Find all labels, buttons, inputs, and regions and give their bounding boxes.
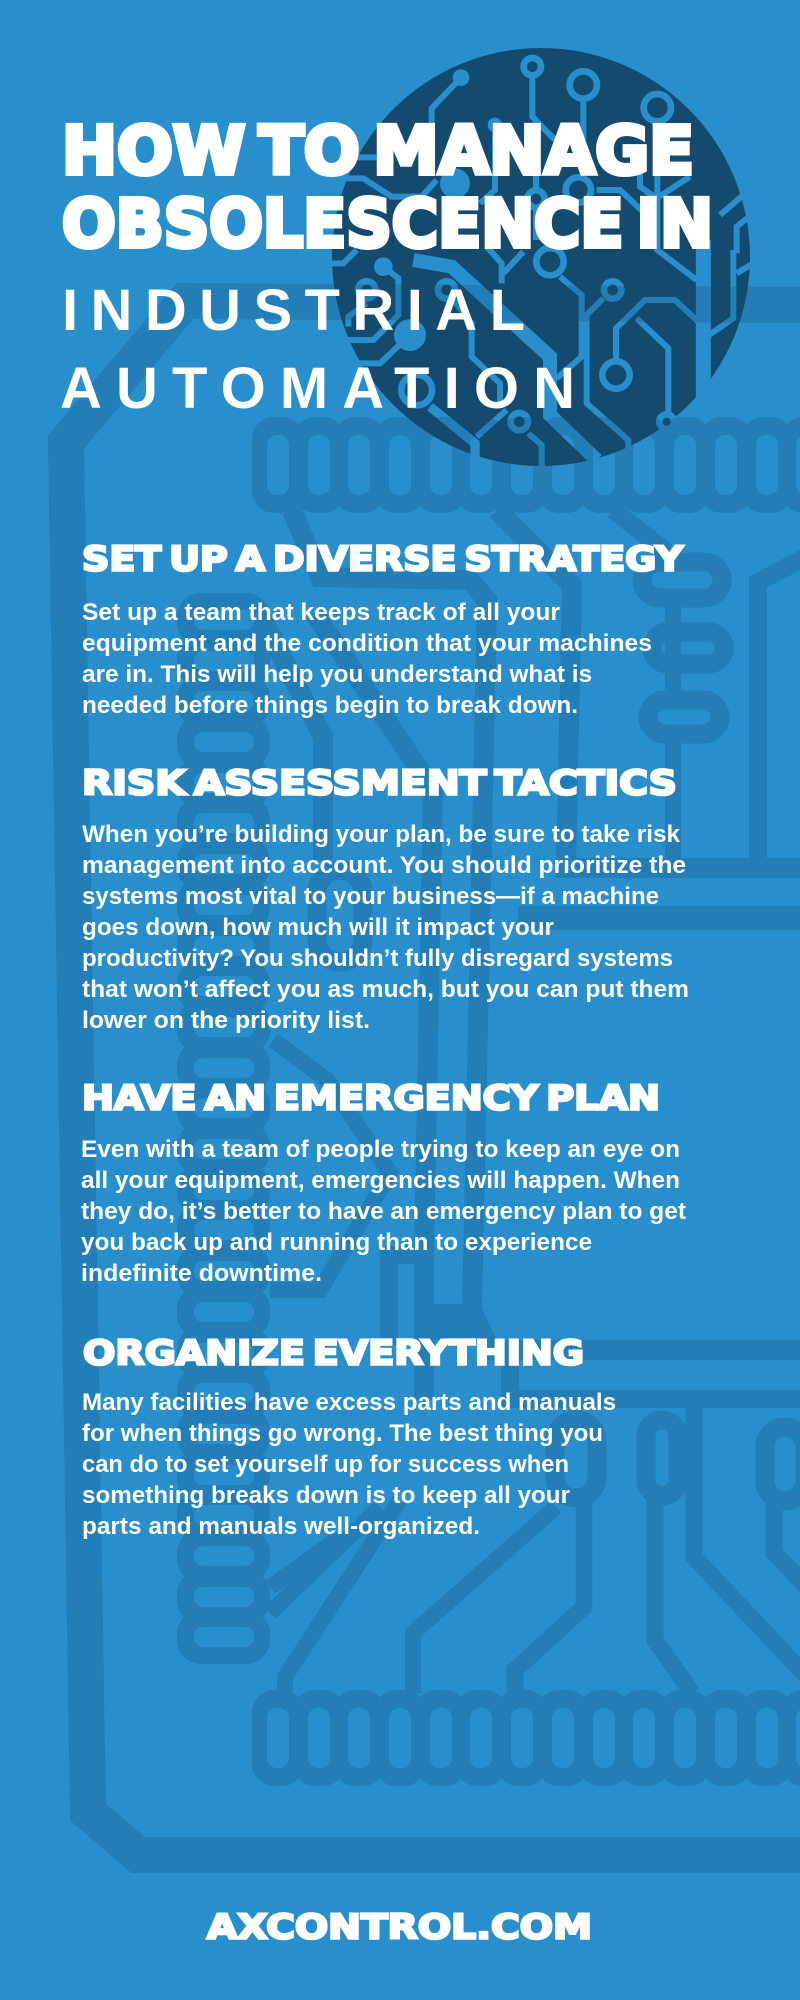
body text: they do, it’s better to have an emergency plan to get: [81, 1198, 686, 1225]
top coil: [252, 417, 800, 513]
body text: equipment and the condition that your machines: [82, 630, 652, 657]
vertical coil: [177, 593, 270, 1664]
body text: systems most vital to your business—if a machine: [82, 883, 659, 910]
heading: HAVE AN EMERGENCY PLAN: [82, 1079, 660, 1119]
body text: productivity? You shouldn’t fully disregard systems: [82, 945, 673, 972]
body text: can do to set yourself up for success when: [82, 1451, 569, 1478]
body text: Set up a team that keeps track of all your: [82, 599, 560, 626]
body text: for when things go wrong. The best thing you: [82, 1420, 603, 1447]
heading: SET UP A DIVERSE STRATEGY: [82, 540, 683, 580]
circuit board background pattern: [66, 301, 800, 1855]
body text: parts and manuals well-organized.: [82, 1513, 480, 1540]
body text: [81, 1136, 686, 1287]
body text: indefinite downtime.: [81, 1260, 322, 1287]
title line 2: OBSOLESCENCE IN: [62, 186, 713, 262]
heading: ORGANIZE EVERYTHING: [83, 1334, 584, 1374]
section: organize everything: [82, 1334, 616, 1540]
circuit disc illustration: [332, 48, 750, 466]
body text: Many facilities have excess parts and manuals: [82, 1389, 616, 1416]
body text: all your equipment, emergencies will happen. When: [81, 1167, 680, 1194]
bottom coil: [252, 1690, 800, 1786]
body text: When you’re building your plan, be sure to take risk: [82, 821, 681, 848]
title line 1: HOW TO MANAGE: [62, 112, 694, 190]
body text: [82, 821, 689, 1034]
outer board trace: [66, 301, 800, 1855]
body text: goes down, how much will it impact your: [82, 914, 554, 941]
body text: lower on the priority list.: [82, 1007, 370, 1034]
subtitle line 2: AUTOMATION: [60, 356, 575, 421]
section: set up a diverse strategy: [82, 540, 683, 719]
body text: something breaks down is to keep all your: [82, 1482, 570, 1509]
oval pad trio: [317, 562, 800, 1501]
body text: needed before things begin to break down.: [82, 692, 578, 719]
body text: management into account. You should prioritize the: [82, 852, 686, 879]
body text: are in. This will help you understand what is: [82, 661, 592, 688]
subtitle line 1: INDUSTRIAL: [62, 278, 525, 343]
title: [60, 112, 713, 421]
section: risk assessment tactics: [82, 764, 689, 1034]
body text: that won’t affect you as much, but you can put them: [82, 976, 689, 1003]
body text: Even with a team of people trying to keep an eye on: [81, 1136, 680, 1163]
body text: you back up and running than to experience: [81, 1229, 592, 1256]
body text: [82, 599, 652, 719]
section: have an emergency plan: [81, 1079, 686, 1287]
body text: [82, 1389, 616, 1540]
heading: RISK ASSESSMENT TACTICS: [82, 764, 677, 804]
footer website: AXCONTROL.COM: [207, 1908, 592, 1948]
